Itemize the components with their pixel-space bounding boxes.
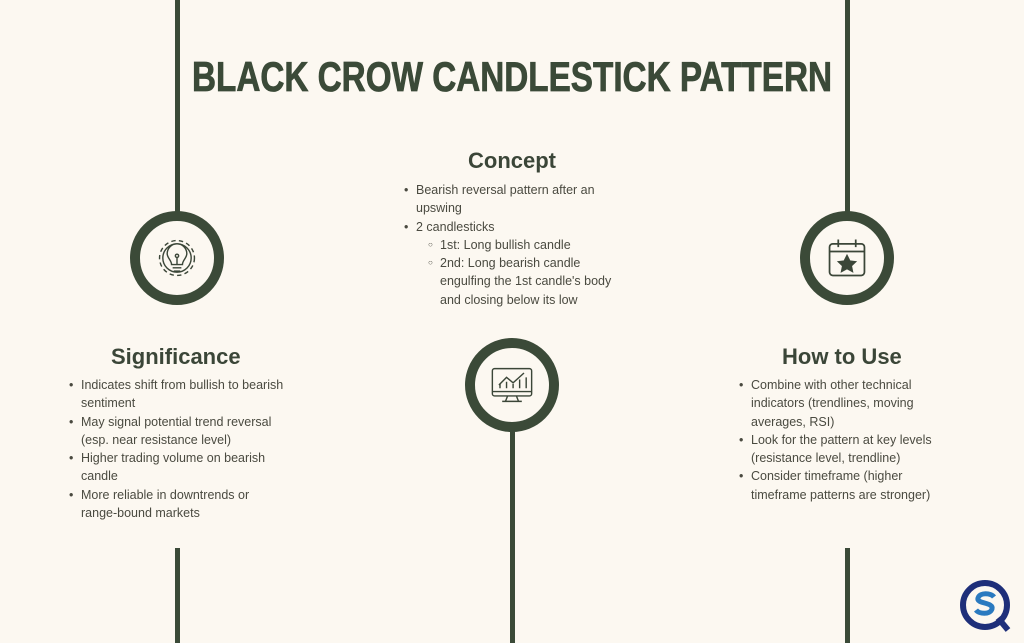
text: significance: Higher trading volume on bearish: [81, 451, 265, 465]
text: significance: (esp. near resistance level): [81, 433, 231, 447]
text: how to use: Consider timeframe (higher timeframe patterns are stronger): [751, 469, 930, 502]
text: significance: Indicates shift from bullish to bearish: [81, 378, 283, 392]
text: concept: Bearish reversal pattern after an upswing: [416, 183, 595, 215]
text: significance: sentiment: [81, 396, 135, 410]
heading: significance: Significance: [111, 344, 241, 369]
text: how to use: Look for the pattern at key levels (resistance level, trendline): [751, 433, 932, 465]
text: concept: 2 candlesticks: [416, 220, 495, 234]
text: significance: [70, 378, 283, 520]
text: concept: 1st: Long bullish candle: [440, 238, 571, 252]
heading: how to use: How to Use: [782, 344, 902, 369]
icon: lightbulb gear: [130, 211, 224, 305]
heading: concept: Concept: [468, 148, 556, 173]
text: significance: candle: [81, 469, 118, 483]
text: concept: [404, 183, 612, 307]
text: significance: May signal potential trend reversal: [81, 415, 271, 429]
text: how to use: Combine with other technical indicators (trendlines, moving averages, RSI): [751, 378, 914, 429]
logo: [960, 580, 1010, 632]
text: how to use: [740, 378, 932, 502]
icon: monitor chart: [465, 338, 559, 432]
text: significance: range-bound markets: [81, 506, 200, 520]
text: concept: 2nd: Long bearish candle engulfing the 1st candle's body and closing below its low: [440, 256, 611, 307]
icon: calendar star: [800, 211, 894, 305]
text: significance: More reliable in downtrends or: [81, 488, 249, 502]
